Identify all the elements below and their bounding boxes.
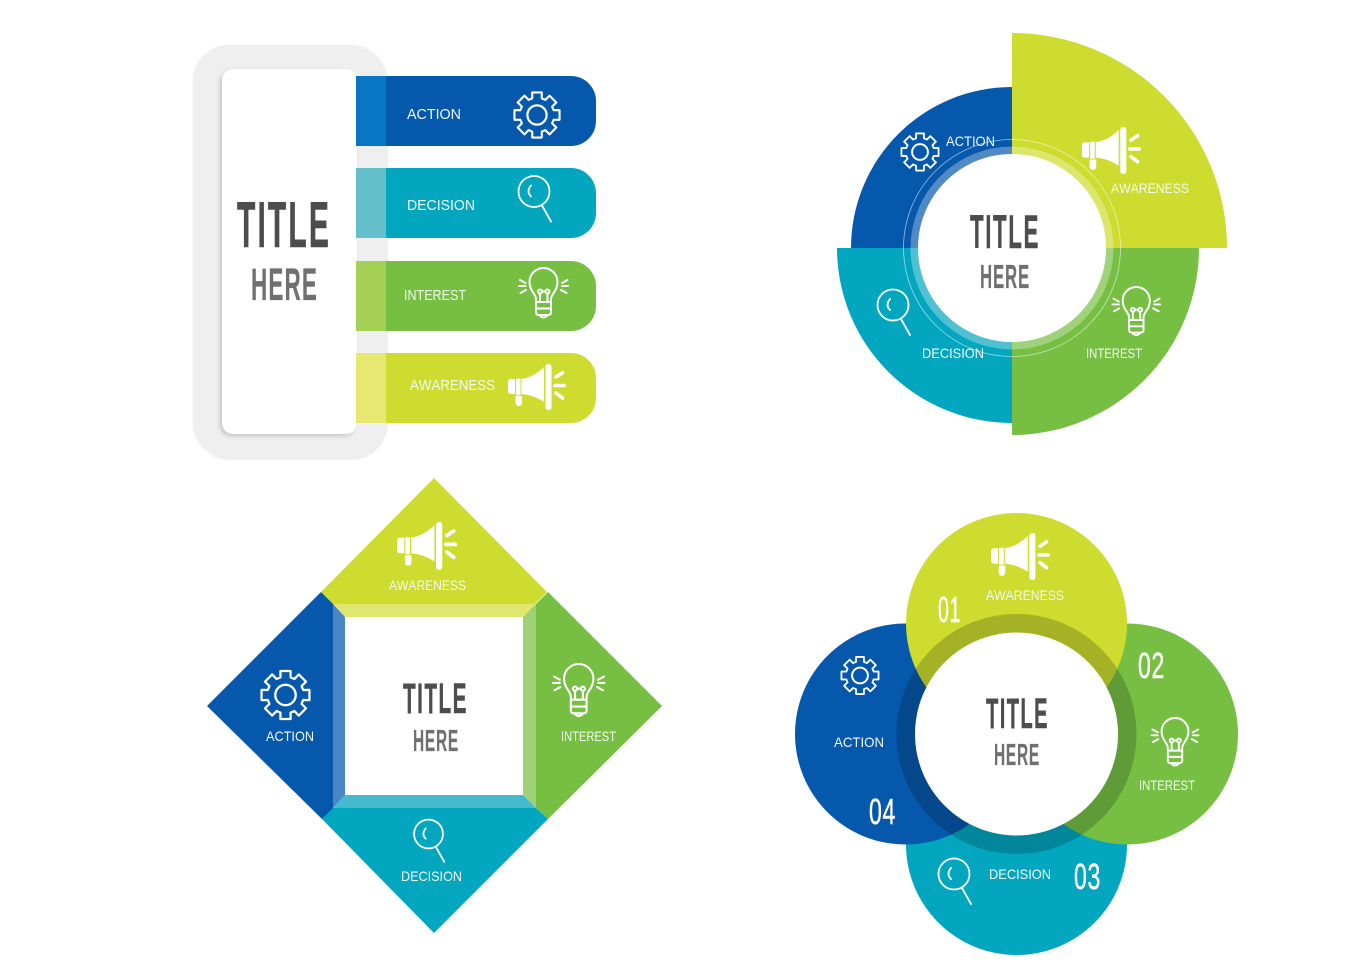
- icon: light bulb: [553, 664, 604, 716]
- translucent inner ring: [914, 150, 1110, 346]
- tab: decision: DECISION: [407, 197, 475, 214]
- icon: magnifier: [938, 858, 971, 904]
- icon: magnifier: [414, 820, 444, 862]
- icon: gear: [514, 92, 560, 138]
- panel: radial sector chart: [837, 33, 1227, 435]
- subtitle: HERE: [980, 258, 1030, 295]
- icon: megaphone: [397, 522, 455, 570]
- label: action: ACTION: [834, 734, 884, 750]
- panel: overlapping circles: [795, 513, 1238, 955]
- icon: megaphone: [508, 364, 564, 410]
- segment: awareness: [321, 478, 547, 604]
- label: action: ACTION: [266, 728, 314, 744]
- panel: diamond: TITLE: [403, 675, 468, 723]
- dark translucent ring: [906, 624, 1127, 844]
- icon: megaphone: [991, 533, 1048, 580]
- centre disc: [915, 632, 1118, 836]
- icon: magnifier: [518, 176, 551, 222]
- icon: light bulb: [1112, 287, 1160, 335]
- tab: awareness: AWARENESS: [410, 377, 495, 394]
- tab: awareness: [356, 353, 596, 423]
- label: decision: DECISION: [922, 345, 984, 361]
- tab: action: ACTION: [407, 106, 461, 123]
- label: awareness: AWARENESS: [986, 587, 1064, 603]
- label: interest: INTEREST: [1086, 345, 1142, 361]
- circle: interest: [1017, 624, 1238, 844]
- icon: megaphone: [1082, 127, 1139, 174]
- white title card: [222, 69, 357, 434]
- number 03: 03: [1074, 856, 1101, 897]
- panel: diamond: HERE: [413, 723, 459, 758]
- bevels around the centre: [333, 604, 536, 808]
- label: awareness: AWARENESS: [1111, 180, 1189, 196]
- number 01: 01: [938, 589, 961, 630]
- label: decision: DECISION: [989, 866, 1051, 882]
- label: awareness: AWARENESS: [389, 577, 466, 593]
- segment: interest: [536, 592, 662, 819]
- label: interest: INTEREST: [561, 728, 616, 744]
- number 04: 04: [869, 791, 896, 832]
- number 02: 02: [1138, 645, 1165, 686]
- centre square: [345, 617, 523, 795]
- segment: decision: [322, 808, 548, 933]
- icon: light bulb: [1152, 718, 1199, 766]
- centre disc: [918, 154, 1106, 342]
- sector: action: [851, 87, 1012, 248]
- grey rounded frame: [193, 45, 386, 458]
- label: action: ACTION: [946, 133, 995, 149]
- panel: overlapping circles: TITLE: [986, 690, 1049, 738]
- icon: light bulb: [519, 268, 568, 318]
- panel: overlapping circles: HERE: [994, 737, 1040, 772]
- label: decision: DECISION: [401, 868, 462, 884]
- panel: radial sector chart: TITLE: [970, 205, 1040, 258]
- label: interest: INTEREST: [1139, 777, 1195, 793]
- sector: interest: [1012, 248, 1199, 435]
- sector: awareness: [1012, 33, 1227, 248]
- tab: interest: INTEREST: [404, 287, 466, 304]
- panel: vertical tab list: TITLE: [237, 188, 331, 261]
- circle: decision: [906, 734, 1127, 955]
- tab: action: [356, 76, 596, 146]
- circle: action: [795, 624, 1016, 844]
- icon: magnifier: [878, 290, 910, 335]
- panel: vertical tab list: HERE: [251, 259, 318, 310]
- sector: decision: [837, 248, 1012, 423]
- panel: vertical tab list: [193, 45, 596, 458]
- panel: diamond: [207, 478, 662, 933]
- icon: gear: [841, 657, 879, 694]
- tab: interest: [356, 261, 596, 331]
- tab: decision: [356, 168, 596, 238]
- icon: gear: [262, 671, 309, 719]
- thin outer ring: [904, 140, 1120, 356]
- circle: awareness: [906, 513, 1127, 734]
- icon: gear: [901, 133, 939, 171]
- segment: action: [207, 592, 333, 819]
